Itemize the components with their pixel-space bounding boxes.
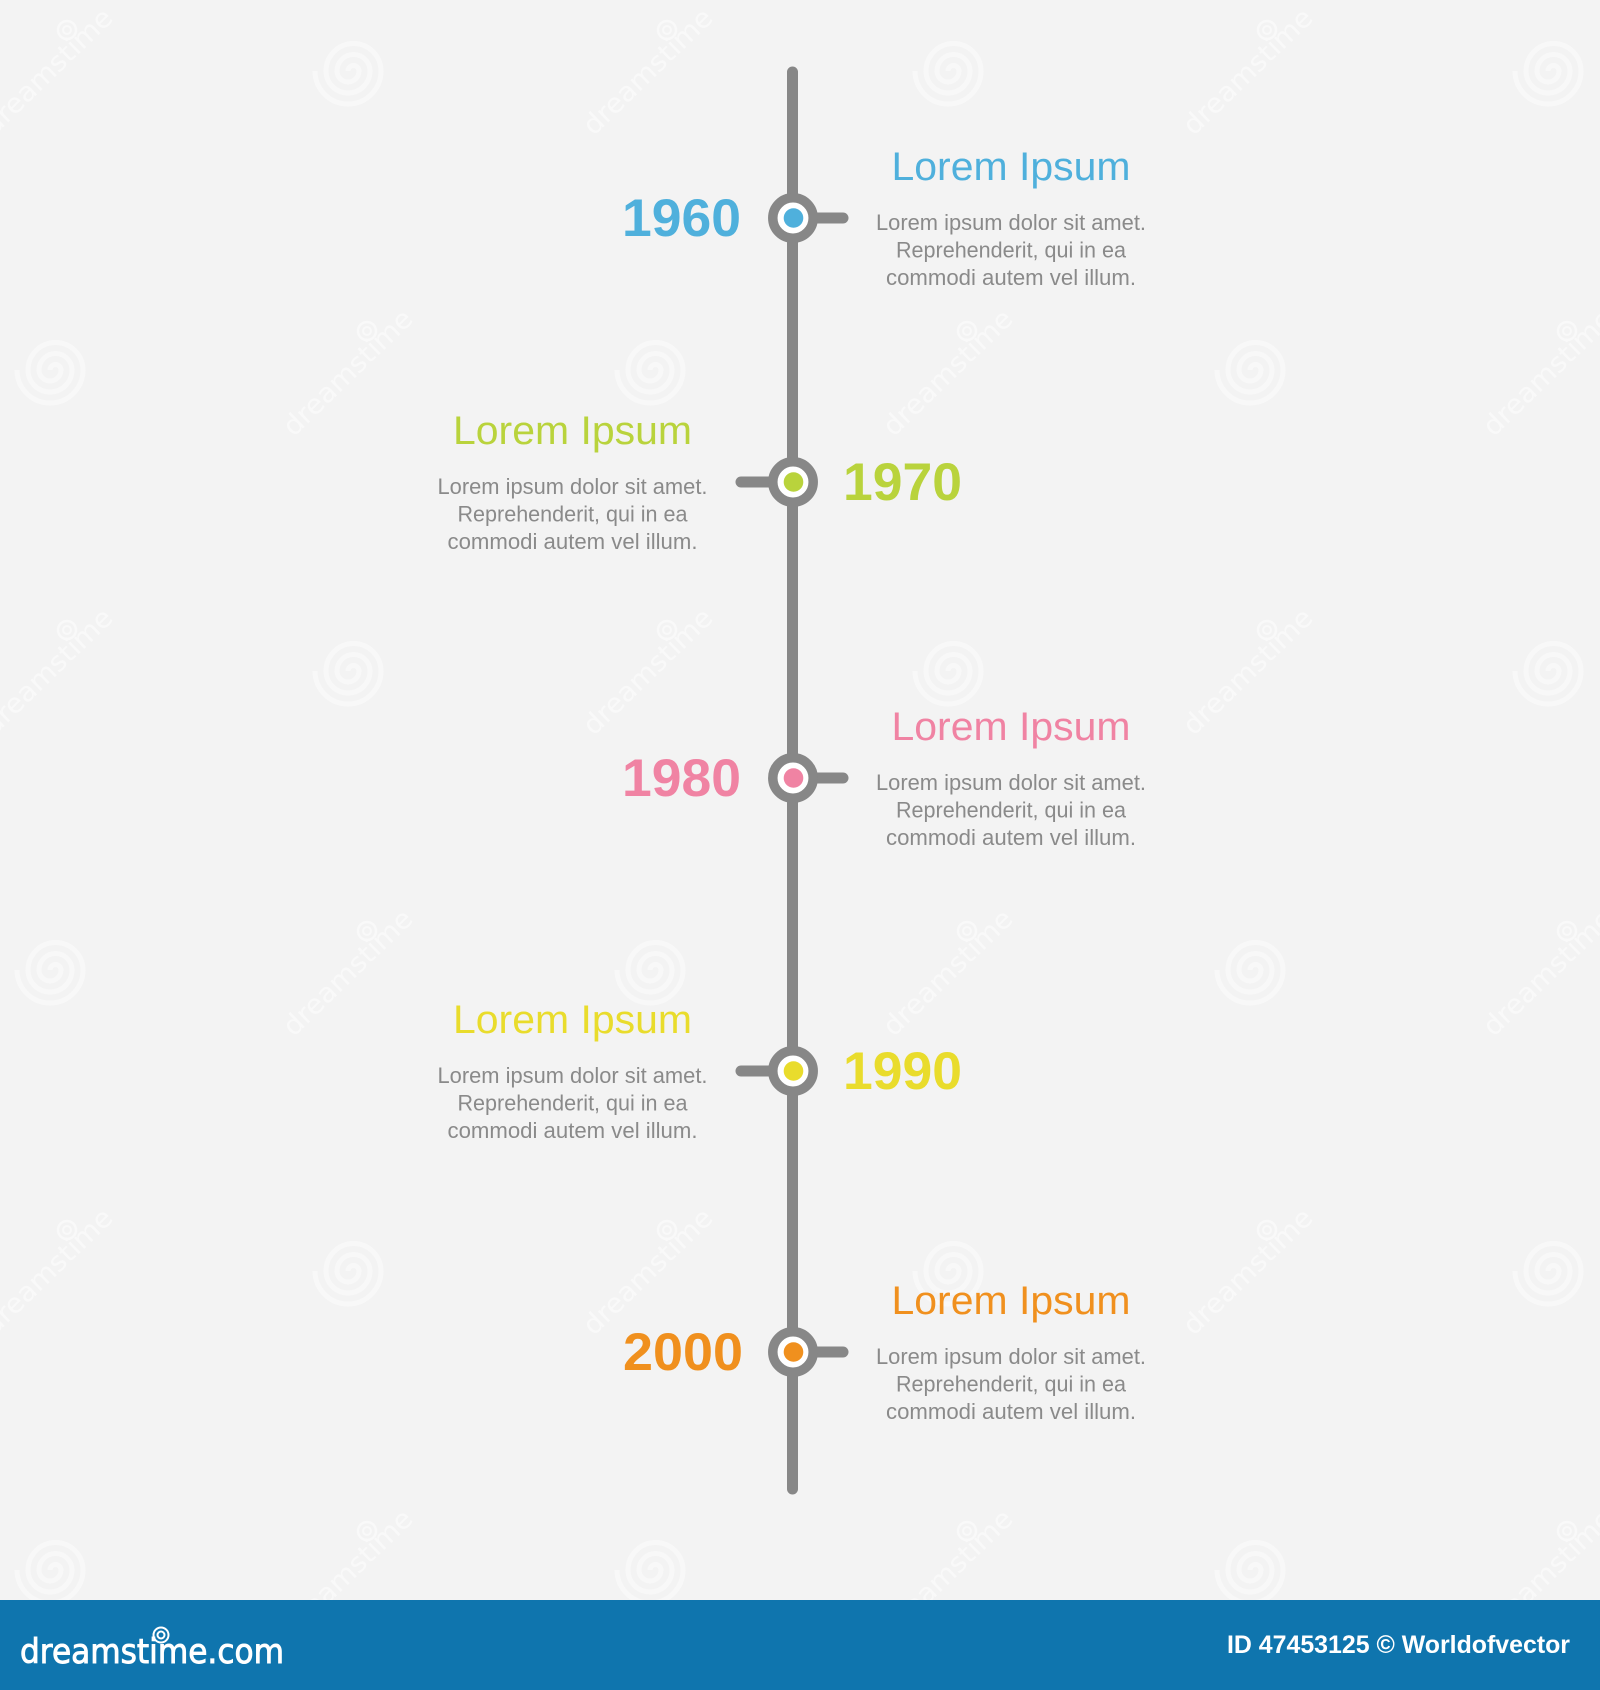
node 2000 (773, 1332, 843, 1372)
watermark pattern: dreamstime (877, 303, 1019, 442)
milestone 1960 (622, 145, 1146, 290)
watermark pattern: dreamstime (577, 2, 719, 141)
description 2000: Reprehenderit, qui in ea (896, 1372, 1127, 1396)
footer image id: ID 47453125 © Worldofvector (1227, 1631, 1570, 1659)
watermark pattern: dreamstime (277, 903, 419, 1042)
description 2000: commodi autem vel illum. (886, 1399, 1136, 1424)
watermark pattern: dreamstime (1177, 2, 1319, 141)
footer logo text: dreamstime.com (20, 1632, 284, 1672)
description 1980: Reprehenderit, qui in ea (896, 798, 1127, 822)
watermark pattern: dreamstime (577, 1202, 719, 1341)
milestone 2000 (623, 1279, 1146, 1424)
description 2000: Lorem ipsum dolor sit amet. (876, 1344, 1146, 1369)
description 1970 (438, 474, 708, 554)
heading 1990: Lorem Ipsum (453, 998, 692, 1042)
watermark pattern: dreamstime (277, 303, 419, 442)
footer bar (0, 1600, 1600, 1690)
description 1980 (876, 770, 1146, 850)
watermark pattern: dreamstime (277, 1503, 419, 1642)
description 1960: commodi autem vel illum. (886, 265, 1136, 290)
node 1980 (773, 758, 843, 798)
year 1970: 1970 (843, 453, 962, 512)
year 1980: 1980 (622, 749, 741, 808)
milestone 1970 (438, 409, 962, 554)
description 1970: commodi autem vel illum. (448, 529, 698, 554)
description 1990: commodi autem vel illum. (448, 1118, 698, 1143)
description 1990: Reprehenderit, qui in ea (458, 1090, 688, 1116)
description 1980: Lorem ipsum dolor sit amet. (876, 770, 1146, 795)
footer logo spiral icon (154, 1628, 168, 1642)
year 2000: 2000 (623, 1323, 743, 1382)
watermark pattern: dreamstime (577, 602, 719, 741)
heading 2000: Lorem Ipsum (892, 1279, 1130, 1323)
node 1990 (741, 1051, 813, 1091)
description 1960: Reprehenderit, qui in ea (896, 238, 1127, 262)
milestone 1980 (622, 705, 1146, 850)
description 1990 (438, 1063, 708, 1143)
watermark pattern: dreamstime (877, 903, 1019, 1042)
description 2000 (876, 1344, 1146, 1424)
node 1960 (773, 198, 843, 238)
node 1970 (741, 462, 813, 502)
watermark pattern: dreamstime (1177, 1202, 1319, 1341)
watermark pattern: dreamstime (877, 1503, 1019, 1642)
heading 1980: Lorem Ipsum (892, 705, 1130, 749)
description 1970: Reprehenderit, qui in ea (458, 502, 688, 526)
heading 1960: Lorem Ipsum (892, 145, 1130, 189)
milestone 1990 (438, 998, 962, 1143)
heading 1970: Lorem Ipsum (453, 409, 692, 453)
description 1990: Lorem ipsum dolor sit amet. (438, 1063, 708, 1088)
year 1960: 1960 (622, 189, 741, 248)
watermark pattern: dreamstime (1177, 602, 1319, 741)
description 1960: Lorem ipsum dolor sit amet. (876, 210, 1146, 235)
description 1960 (876, 210, 1146, 290)
timeline vertical line (787, 72, 798, 1489)
description 1970: Lorem ipsum dolor sit amet. (438, 474, 708, 499)
description 1980: commodi autem vel illum. (886, 825, 1136, 850)
year 1990: 1990 (843, 1042, 962, 1101)
